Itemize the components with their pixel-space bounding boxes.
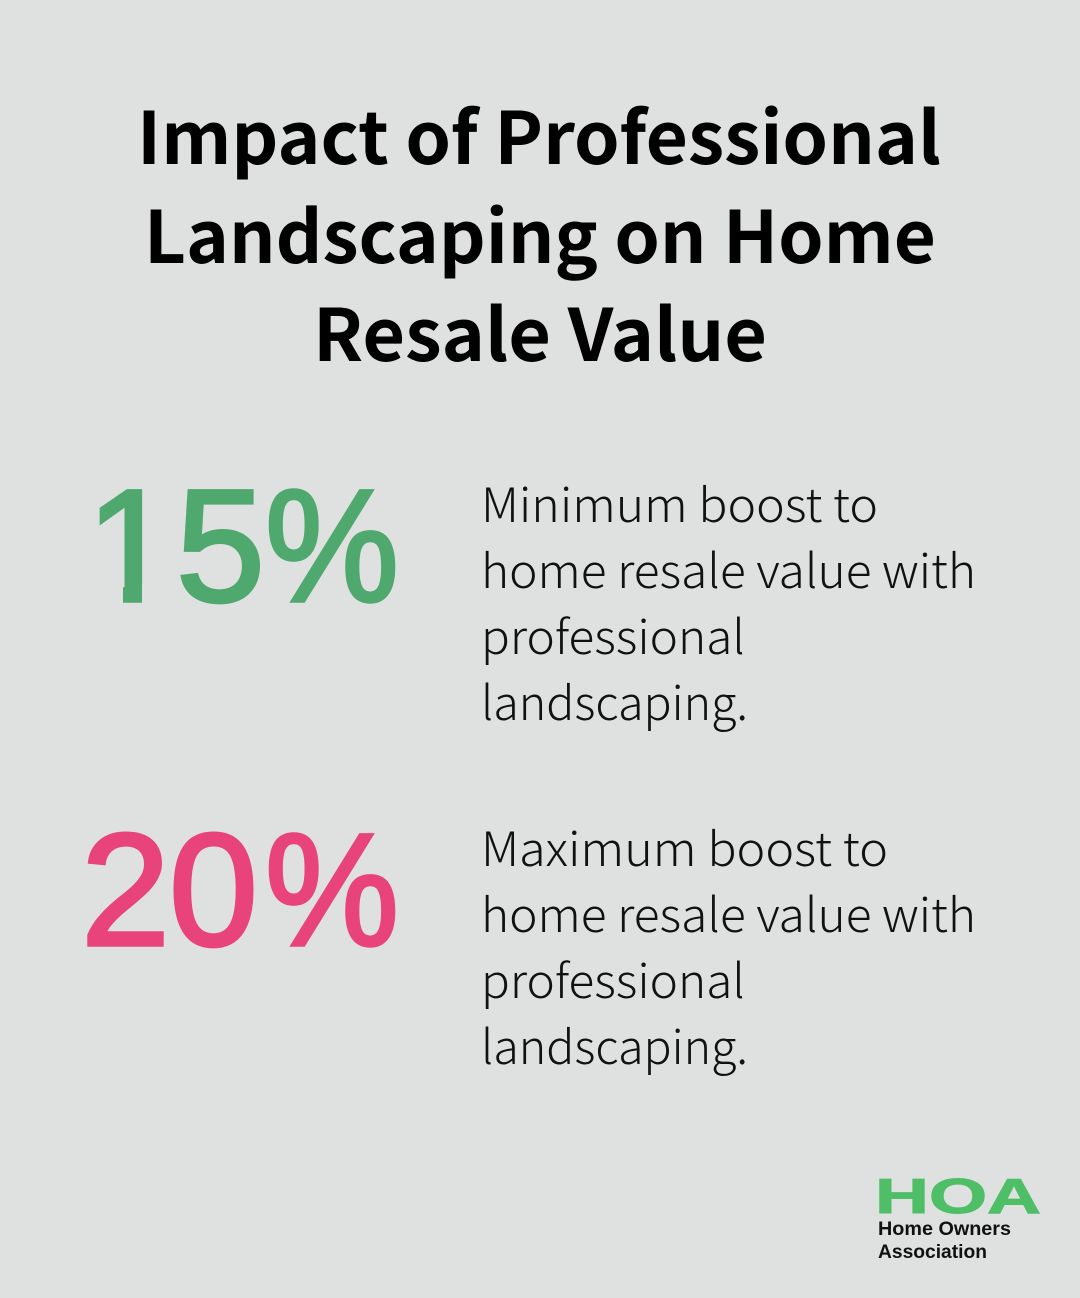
description: maximum boost: landscaping. xyxy=(481,1009,748,1078)
logo: Home Owners Association: HOA xyxy=(875,1170,1041,1224)
description: maximum boost xyxy=(481,811,976,1078)
stat: 20%: % xyxy=(265,800,399,979)
description: maximum boost: home resale value with xyxy=(481,877,976,946)
logo: Home Owners Association xyxy=(875,1170,1041,1263)
description: maximum boost: professional xyxy=(481,943,745,1012)
logo: Home Owners Association: Home Owners xyxy=(878,1219,1011,1240)
title: Landscaping on Home xyxy=(144,179,936,284)
stat: 15%: % xyxy=(265,456,399,635)
logo: Home Owners Association: Association xyxy=(878,1242,987,1263)
description: maximum boost: Maximum boost to xyxy=(481,811,888,880)
stat: 20% xyxy=(81,800,399,979)
stat: 20%: 20 xyxy=(81,800,258,979)
description: minimum boost: home resale value with xyxy=(481,533,976,602)
title: Resale Value xyxy=(313,277,767,382)
title: Impact of Professional xyxy=(137,80,941,185)
description: minimum boost: Minimum boost to xyxy=(481,467,878,536)
description: minimum boost: professional xyxy=(481,599,745,668)
description: minimum boost: landscaping. xyxy=(481,665,748,734)
stat: 15% xyxy=(100,488,396,604)
stat: 15%: 15 xyxy=(86,456,265,635)
title xyxy=(137,80,941,382)
description: minimum boost xyxy=(481,467,976,734)
